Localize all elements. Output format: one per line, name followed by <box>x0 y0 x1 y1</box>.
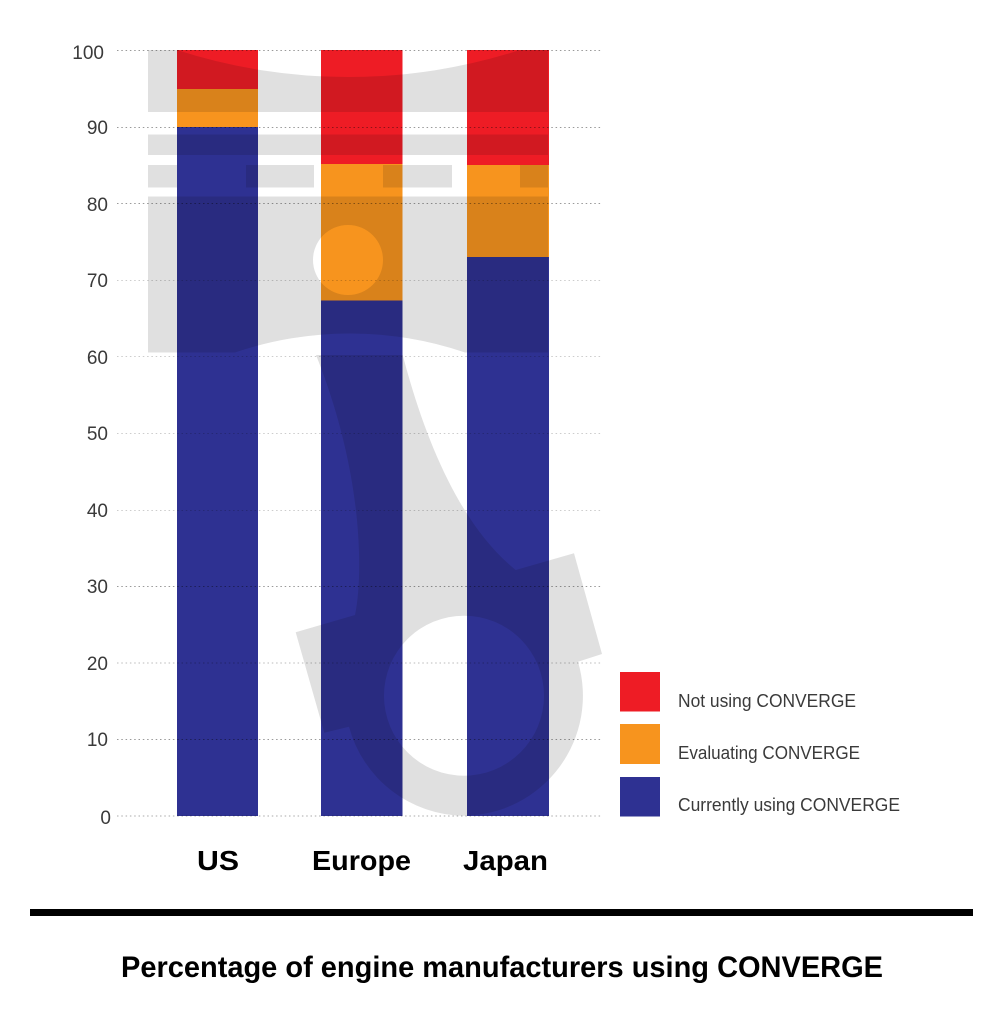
legend item: currently using: Currently using CONVERGE <box>678 795 900 815</box>
y axis labels: 20 <box>87 654 108 675</box>
category labels: Europe <box>312 845 411 876</box>
y axis labels: 60 <box>87 348 108 369</box>
connecting rod with big end <box>296 355 602 816</box>
piston skirt with pin hole <box>148 196 548 352</box>
legend item: not using: Not using CONVERGE <box>678 691 856 711</box>
legend item: not using <box>620 672 856 712</box>
category labels <box>197 845 548 876</box>
title: Percentage of engine manufacturers using CONVERGE <box>121 951 883 984</box>
y axis labels: 70 <box>87 271 108 292</box>
bar: Japan <box>467 50 549 816</box>
y axis labels: 0 <box>100 808 111 829</box>
icon: piston and connecting rod watermark <box>148 50 602 816</box>
piston crown <box>148 50 548 112</box>
y axis labels: 80 <box>87 195 108 216</box>
bar: US <box>177 50 258 816</box>
y axis labels <box>72 43 111 829</box>
y axis labels: 90 <box>87 118 108 139</box>
category labels: US <box>197 845 239 876</box>
legend <box>620 672 900 816</box>
y axis labels: 50 <box>87 424 108 445</box>
legend item: evaluating: Evaluating CONVERGE <box>678 743 860 763</box>
y axis labels: 10 <box>87 730 108 751</box>
legend item: currently using <box>620 777 900 816</box>
y axis labels: 100 <box>72 43 104 64</box>
y axis labels: 30 <box>87 577 108 598</box>
bar chart <box>72 43 602 876</box>
gridlines <box>117 50 601 816</box>
legend item: evaluating <box>620 724 860 764</box>
divider rule <box>30 909 973 916</box>
y axis labels: 40 <box>87 501 108 522</box>
bar: Europe <box>321 50 402 816</box>
piston ring grooves <box>148 134 548 188</box>
category labels: Japan <box>463 845 548 876</box>
